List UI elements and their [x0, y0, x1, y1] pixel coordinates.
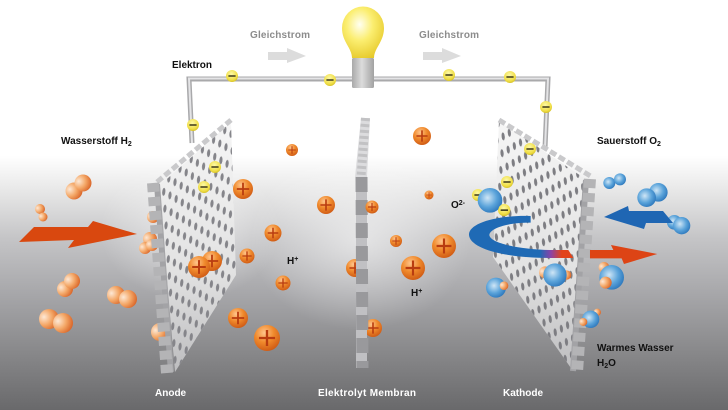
label: oxygen ion: O	[451, 200, 459, 211]
particles behind cathode	[472, 189, 484, 201]
heading: Gleichstrom left: Gleichstrom	[250, 30, 310, 41]
label: hydrogen ion left: +	[294, 256, 298, 263]
arrow: current left	[268, 48, 306, 63]
label: Kathode: Kathode	[503, 388, 543, 399]
arrow: oxygen ions curving to warm water outflow	[469, 216, 657, 264]
particles behind membrane	[346, 259, 382, 337]
label: H2O: H	[597, 358, 604, 369]
label: oxygen ion: 2-	[459, 200, 466, 207]
light bulb	[342, 7, 384, 88]
label: hydrogen ion right: +	[418, 288, 422, 295]
label: Elektron: Elektron	[172, 60, 212, 71]
label: Wasserstoff H2: 2	[128, 141, 132, 148]
label: Sauerstoff O2: Sauerstoff O	[597, 136, 657, 147]
electrons	[187, 69, 552, 216]
hydrogen molecules	[35, 174, 137, 333]
panel: cathode plate	[493, 120, 592, 372]
heading: Gleichstrom right: Gleichstrom	[419, 30, 479, 41]
panel: electrolyte membrane	[355, 118, 370, 368]
label: H2O: 2	[604, 363, 608, 370]
wire circuit	[189, 78, 548, 148]
oxygen and water molecules	[478, 173, 690, 328]
label: Wasserstoff H2: Wasserstoff H	[61, 136, 128, 147]
hydrogen ions	[188, 127, 456, 351]
label: Anode: Anode	[155, 388, 187, 399]
panel: anode plate	[153, 120, 236, 373]
particles behind anode	[139, 211, 169, 341]
arrow: current right	[423, 48, 461, 63]
label: hydrogen ion left: H	[287, 256, 294, 267]
arrow: oxygen inflow	[604, 206, 673, 229]
label: warm water: Warmes Wasser	[597, 343, 674, 354]
arrow: hydrogen inflow	[19, 221, 137, 248]
label: Elektrolyt Membran: Elektrolyt Membran	[318, 388, 416, 399]
label: Sauerstoff O2: 2	[657, 141, 661, 148]
label: H2O: O	[608, 358, 616, 369]
label: hydrogen ion right: H	[411, 288, 418, 299]
